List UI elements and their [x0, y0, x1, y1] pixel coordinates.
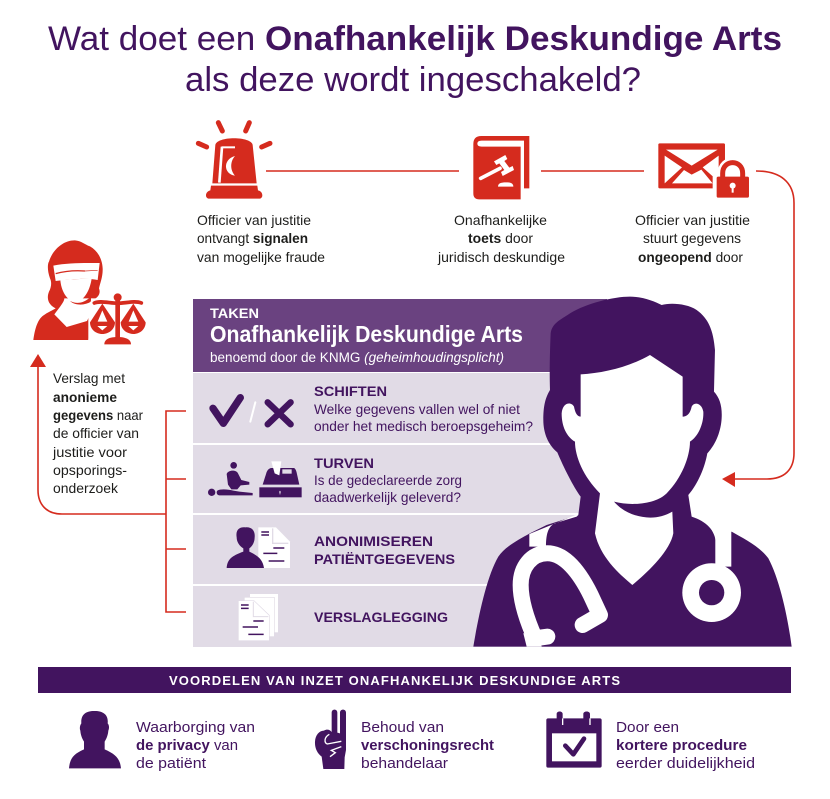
text: benefit privacy: de patiënt	[136, 755, 207, 772]
icon: patient with document	[227, 527, 290, 568]
text: turven	[314, 455, 462, 505]
text: benefit privilege: verschoningsrecht	[361, 737, 494, 754]
illustration: doctor with stethoscope	[473, 297, 792, 647]
text: step 1: ontvangt signalen	[197, 230, 308, 246]
text: step 3: Officier van justitie	[635, 212, 750, 228]
text: benefit procedure	[616, 719, 755, 772]
text: anonimiseren: ANONIMISEREN	[314, 533, 433, 549]
panel heading: benoemd door de KNMG (geheimhoudingsplicht)	[210, 350, 504, 365]
text: benefit procedure: kortere procedure	[616, 737, 747, 754]
text: report note: Verslag met	[53, 370, 125, 386]
text: step 3	[635, 212, 750, 265]
arrow: process connectors	[266, 170, 644, 172]
panel header background	[193, 299, 607, 372]
panel heading	[210, 305, 523, 365]
panel rows	[193, 373, 590, 647]
panel heading: Onafhankelijk Deskundige Arts	[210, 321, 523, 347]
arrow: tasks bracket back to justice	[30, 354, 186, 612]
text: step 1	[197, 212, 325, 265]
text: step 2	[437, 212, 565, 265]
panel heading: TAKEN	[210, 305, 259, 321]
title: als deze wordt ingeschakeld?	[185, 61, 641, 99]
text: schiften: Welke gegevens vallen wel of niet	[314, 401, 520, 417]
text: step 2: juridisch deskundige	[437, 249, 565, 265]
text: report note	[52, 370, 143, 496]
banner: benefits heading: VOORDELEN VAN INZET ONAFHANKELIJK DESKUNDIGE ARTS	[169, 673, 620, 688]
banner: benefits heading	[38, 667, 791, 693]
icon: calendar with check	[546, 711, 602, 768]
text: schiften: SCHIFTEN	[314, 383, 387, 399]
text: schiften: onder het medisch beroepsgeheim?	[314, 418, 533, 434]
text: report note: gegevens naar	[53, 407, 143, 423]
text: anonimiseren: PATIËNTGEGEVENS	[314, 551, 455, 567]
text: report note: de officier van	[53, 425, 139, 441]
arrow: to doctor	[722, 171, 794, 487]
title	[48, 20, 782, 99]
text: benefit procedure: Door een	[616, 719, 679, 736]
text: benefit privilege	[361, 719, 494, 772]
text: anonimiseren	[314, 533, 455, 567]
icon: siren	[198, 123, 270, 199]
text: step 3: stuurt gegevens	[643, 230, 741, 246]
icon: patient silhouette	[69, 711, 121, 768]
text: benefit privacy: Waarborging van	[136, 719, 255, 736]
text: report note: justitie voor	[52, 444, 127, 460]
text: benefit procedure: eerder duidelijkheid	[616, 755, 755, 772]
text: turven: TURVEN	[314, 455, 374, 471]
icon: blindfolded justice with scales	[33, 240, 146, 345]
panel: tasks	[193, 299, 607, 647]
text: schiften	[314, 383, 533, 434]
text: benefit privilege: behandelaar	[361, 755, 448, 772]
text: turven: Is de gedeclareerde zorg	[314, 472, 462, 488]
icon: sealed envelope with lock	[658, 143, 753, 202]
icon: oath hand	[315, 710, 346, 769]
text: step 2: Onafhankelijke	[454, 212, 547, 228]
icon: treatment and cash register	[208, 461, 302, 497]
text: benefit privacy	[136, 719, 255, 772]
text: benefit privacy: de privacy van	[136, 737, 238, 754]
text: benefit privilege: Behoud van	[361, 719, 444, 736]
text: report note: onderzoek	[53, 480, 119, 496]
icon: law book with gavel	[473, 136, 529, 199]
text: step 1: van mogelijke fraude	[197, 249, 325, 265]
text: step 3: ongeopend door	[638, 249, 743, 265]
text: report note: anonieme	[53, 389, 117, 405]
icon: check and cross	[213, 398, 291, 424]
text: report note: opsporings-	[53, 462, 127, 478]
text: turven: daadwerkelijk geleverd?	[314, 489, 461, 505]
text: verslaglegging: VERSLAGLEGGING	[314, 609, 448, 625]
title: Wat doet een Onafhankelijk Deskundige Arts	[48, 20, 782, 58]
text: step 2: toets door	[468, 230, 533, 246]
icon: document stack	[238, 594, 278, 641]
text: step 1: Officier van justitie	[197, 212, 311, 228]
